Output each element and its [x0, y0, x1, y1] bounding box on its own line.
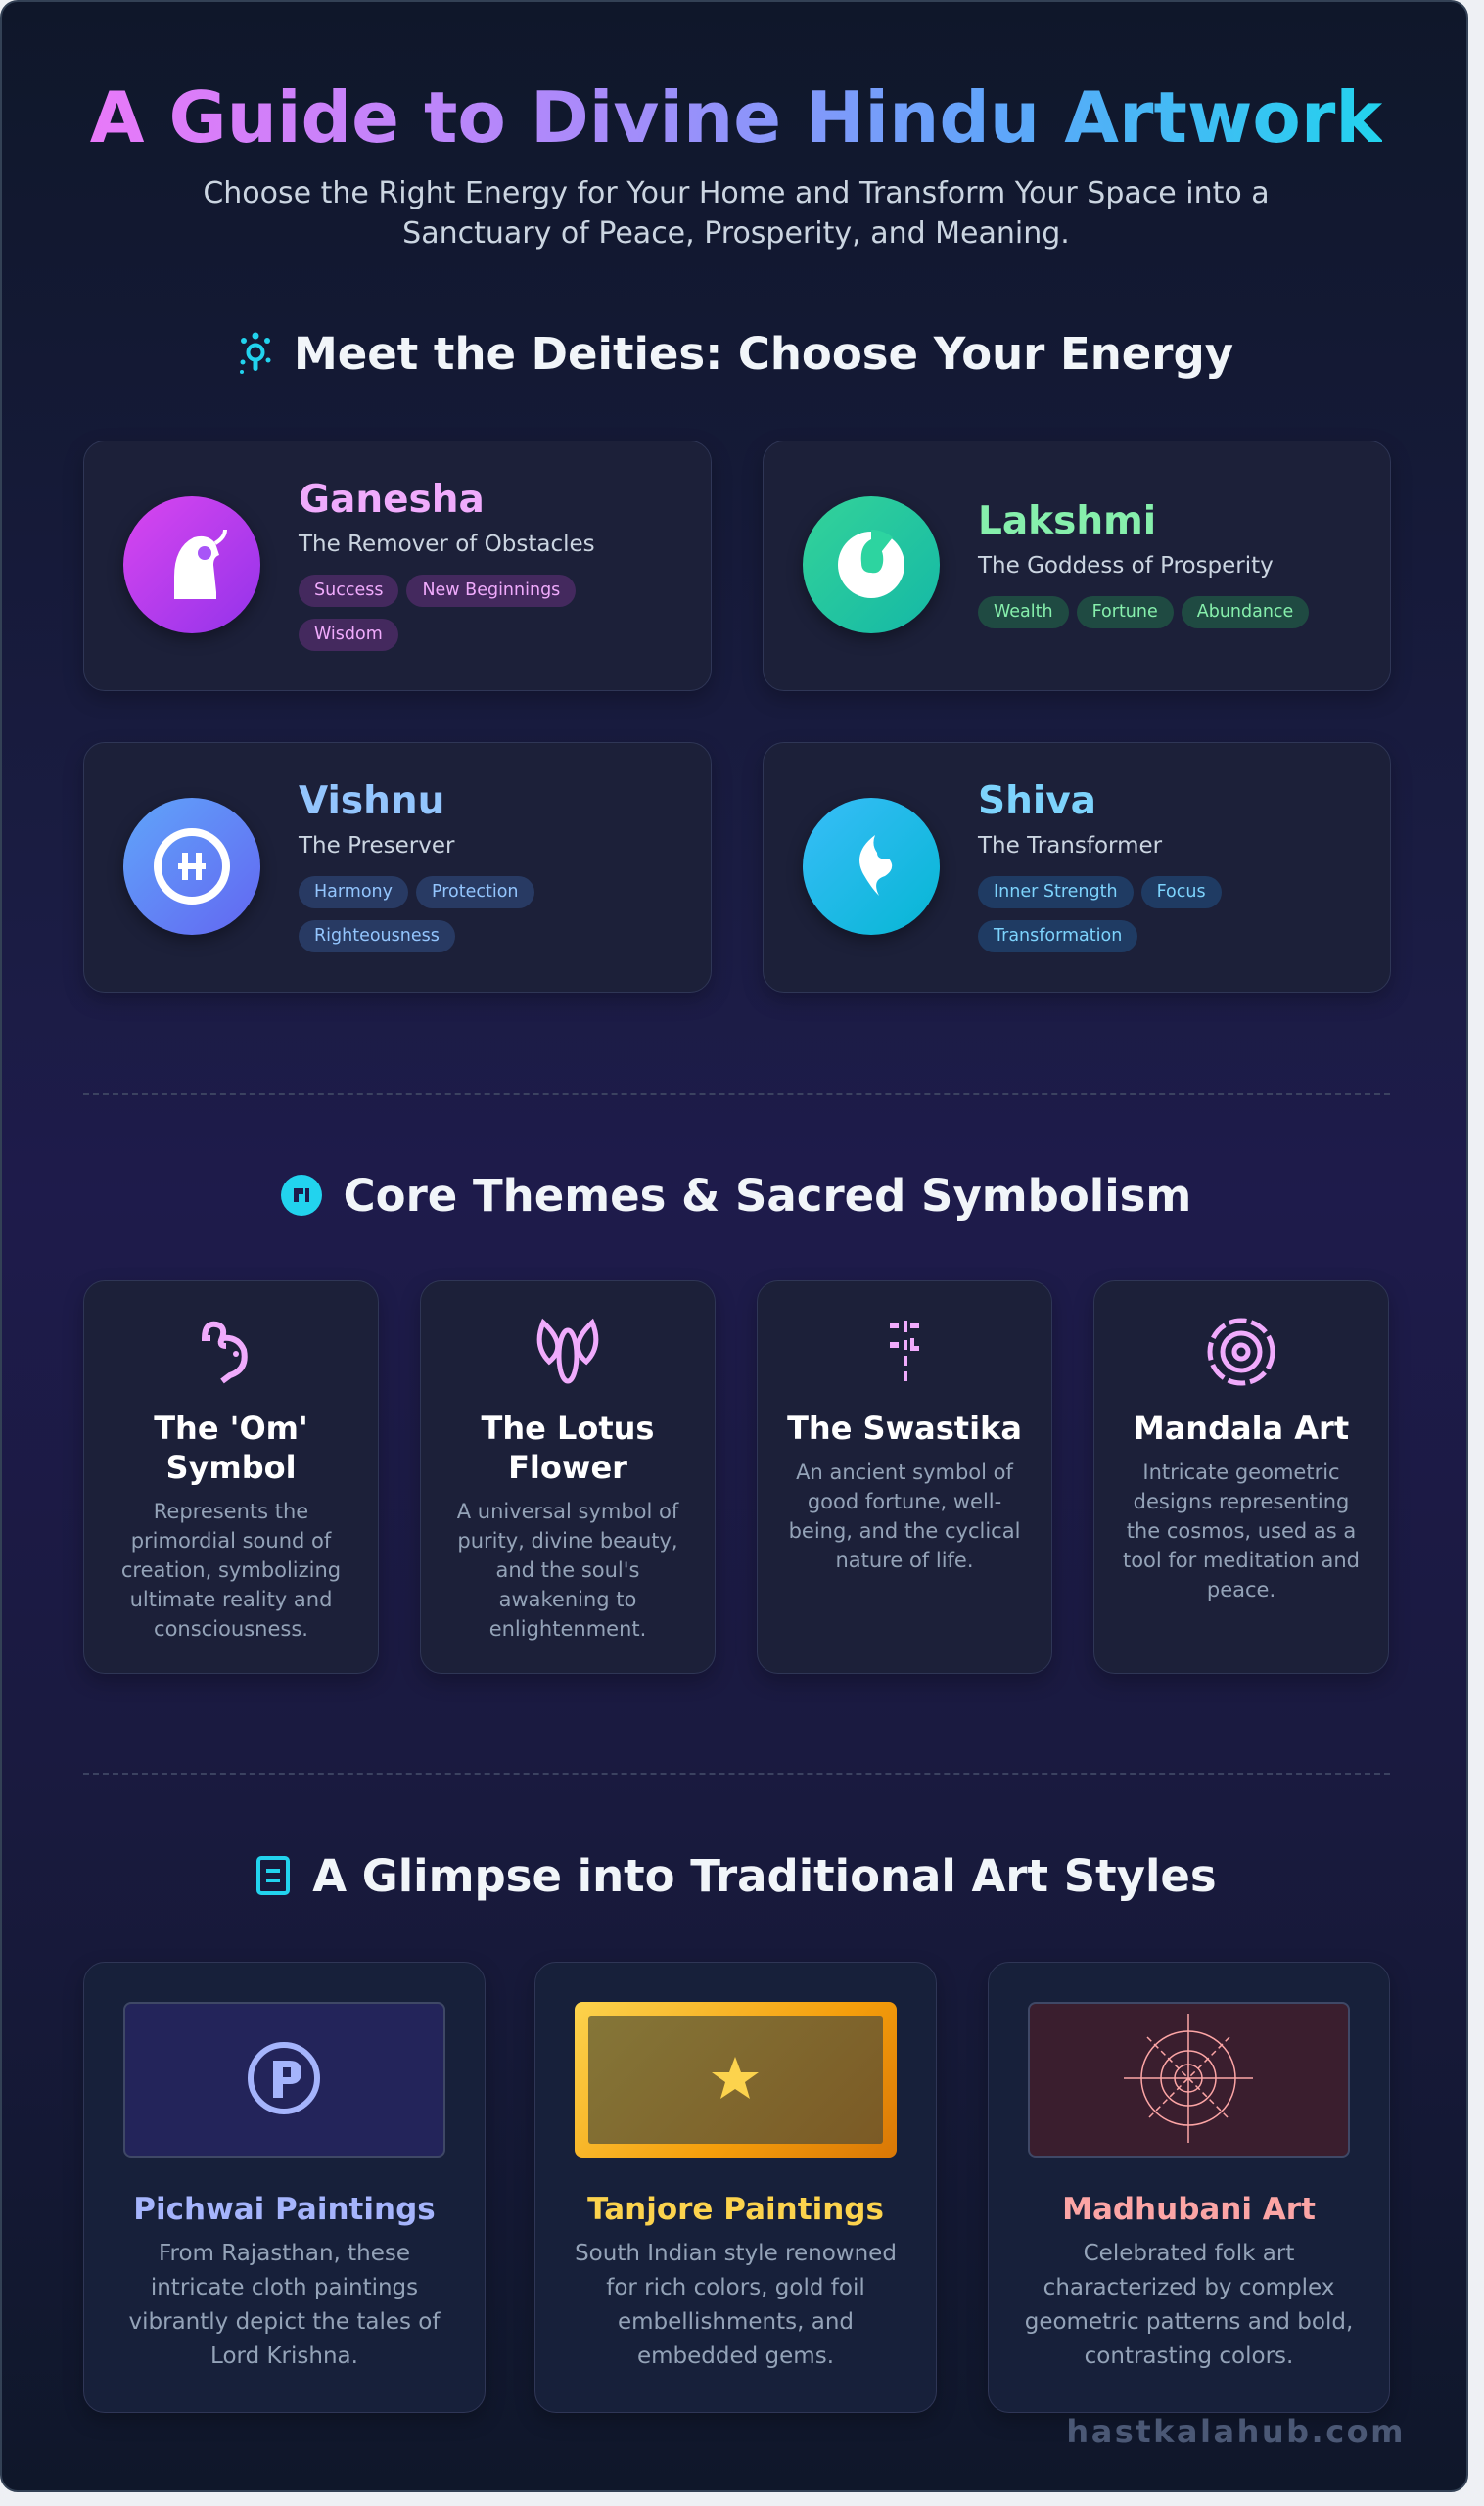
image: pichwai: [123, 2002, 445, 2158]
panel: pichwai: From Rajasthan, these intricate cloth paintings vibrantly depict the tales of Lord Krishna.: [129, 2241, 440, 2369]
subtitle: [203, 176, 1270, 251]
panel: Ganesha: The Remover of Obstacles: [299, 532, 595, 557]
icon: lotus: [536, 1318, 599, 1384]
panel: mandala: Intricate geometric designs representing the cosmos, used as a tool for meditation and peace.: [1123, 1461, 1360, 1601]
icon: mandala: [1208, 1318, 1275, 1386]
panel: Vishnu: The Preserver: [299, 833, 454, 859]
panel: tanjore: [534, 1962, 937, 2413]
panel: swastika: An ancient symbol of good fortune, well-being, and the cyclical nature of life.: [789, 1461, 1020, 1572]
tags: Wealth: [994, 602, 1053, 622]
panel: madhubani: [988, 1962, 1390, 2413]
panel: lotus: A universal symbol of purity, divine beauty, and the soul's awakening to enlightenment.: [457, 1500, 678, 1641]
panel: swastika: The Swastika: [787, 1410, 1022, 1447]
tags: Protection: [432, 882, 519, 902]
panel: pichwai: Pichwai Paintings: [133, 2192, 436, 2227]
panel: Vishnu: [83, 742, 712, 993]
panel: Shiva: [763, 742, 1391, 993]
panel: pichwai: [83, 1962, 486, 2413]
panel: Lakshmi: The Goddess of Prosperity: [978, 553, 1274, 579]
icon: shiva: [803, 798, 940, 935]
heading: art styles: A Glimpse into Traditional Art Styles: [312, 1850, 1217, 1902]
panel: tanjore: Tanjore Paintings: [587, 2192, 884, 2227]
panel: Shiva: Shiva: [978, 779, 1096, 823]
tags: [978, 596, 1309, 628]
tags: Righteousness: [314, 926, 440, 946]
image: madhubani: [1028, 2002, 1350, 2158]
subtitle: Sanctuary of Peace, Prosperity, and Meaning.: [402, 216, 1070, 251]
icon: vishnu: [123, 798, 260, 935]
panel: Ganesha: [83, 441, 712, 691]
panel: madhubani: Celebrated folk art characterized by complex geometric patterns and bold, contrasting colors.: [1025, 2241, 1353, 2369]
panel: Lakshmi: [763, 441, 1391, 691]
panel: Vishnu: Vishnu: [299, 779, 444, 823]
tags: [978, 876, 1222, 952]
panel: om: The 'Om' Symbol: [154, 1410, 308, 1486]
tags: [299, 876, 534, 952]
heading: meet the deities: Meet the Deities: Choose Your Energy: [294, 328, 1233, 380]
panel: swastika: [757, 1280, 1052, 1674]
tags: Wisdom: [314, 625, 383, 644]
tags: Harmony: [314, 882, 393, 902]
icon: om: [202, 1322, 248, 1384]
title: A Guide to Divine Hindu Artwork: [90, 76, 1382, 159]
icon: swastika: [890, 1321, 919, 1381]
icon: ganesha: [123, 496, 260, 633]
heading: core themes: Core Themes & Sacred Symbolism: [344, 1170, 1191, 1222]
tags: Inner Strength: [994, 882, 1118, 902]
tags: Transformation: [994, 926, 1122, 946]
panel: om: Represents the primordial sound of creation, symbolizing ultimate reality and consciousness.: [121, 1500, 341, 1641]
panel: Ganesha: Ganesha: [299, 478, 485, 522]
tags: Fortune: [1092, 602, 1158, 622]
panel: madhubani: Madhubani Art: [1062, 2192, 1316, 2227]
panel: lotus: [420, 1280, 716, 1674]
panel: mandala: [1093, 1280, 1389, 1674]
panel: mandala: Mandala Art: [1134, 1410, 1349, 1447]
tags: New Beginnings: [422, 580, 560, 600]
tags: Abundance: [1197, 602, 1293, 622]
panel: Shiva: The Transformer: [978, 833, 1162, 859]
panel: tanjore: South Indian style renowned for rich colors, gold foil embellishments, and embedded gems.: [575, 2241, 897, 2369]
tags: [299, 575, 576, 651]
image: tanjore: [575, 2002, 897, 2158]
panel: om: [83, 1280, 379, 1674]
panel: Lakshmi: Lakshmi: [978, 499, 1156, 543]
subtitle: Choose the Right Energy for Your Home and Transform Your Space into a: [203, 176, 1270, 210]
panel: lotus: The Lotus Flower: [482, 1410, 654, 1486]
tags: Success: [314, 580, 383, 600]
icon: lakshmi: [803, 496, 940, 633]
tags: Focus: [1157, 882, 1206, 902]
footer: brand: hastkalahub.com: [1066, 2413, 1406, 2450]
